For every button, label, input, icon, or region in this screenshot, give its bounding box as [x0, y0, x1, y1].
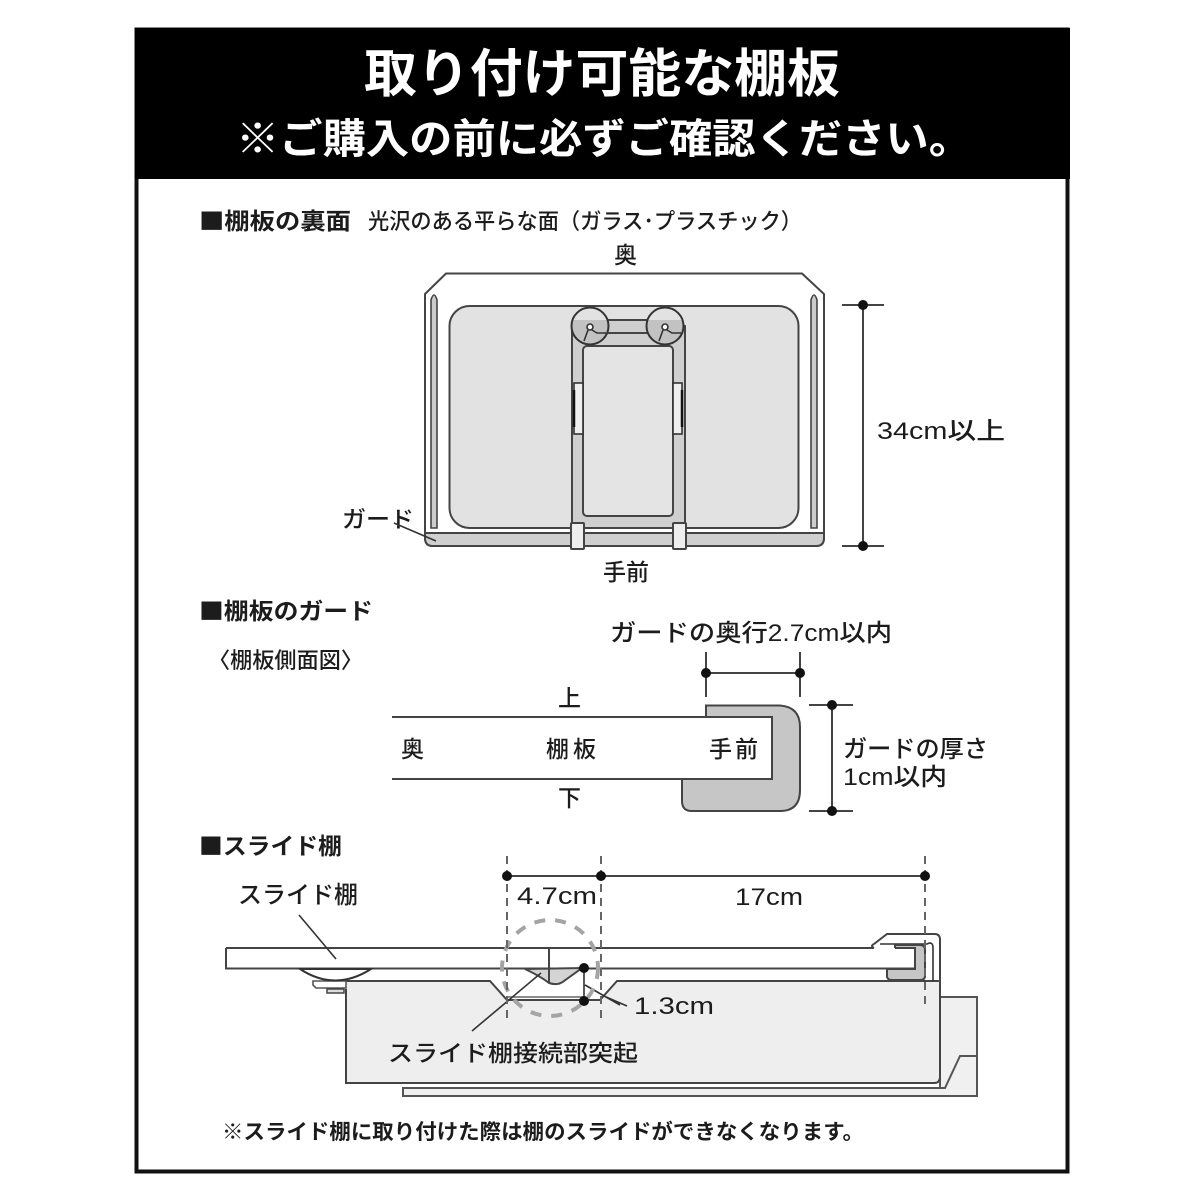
dimension: depth 34cm: 34cm以上 — [877, 418, 1005, 445]
guard section — [682, 706, 800, 811]
header banner — [135, 28, 1070, 179]
rear base piece — [403, 997, 977, 1096]
main base piece — [346, 981, 940, 1083]
guard strip — [425, 533, 824, 546]
outer frame — [136, 30, 1068, 1172]
shelf guard — [887, 945, 925, 980]
hanger bracket — [572, 320, 685, 528]
dimension: 1.3cm: 1.3cm — [634, 993, 714, 1020]
lip of the hook — [872, 944, 874, 948]
label: top: 上 — [558, 679, 581, 713]
mounting hook — [874, 934, 940, 981]
dimension: guard thickness: 1cm以内 — [843, 764, 947, 791]
label: connection protrusion: スライド棚接続部突起 — [388, 1034, 638, 1068]
label: guard — [342, 500, 436, 541]
leader: slide shelf — [299, 915, 336, 959]
text: side view: 〈棚板側面図〉 — [208, 643, 363, 675]
shelf board — [392, 717, 772, 779]
title: 取り付け可能な棚板 — [364, 32, 840, 107]
text: guard depth: ガードの奥行2.7cm以内 — [610, 620, 892, 647]
clips — [571, 523, 686, 549]
dimension: guard thickness — [809, 700, 988, 816]
front pad — [300, 969, 371, 980]
footnote: ※スライド棚に取り付けた際は棚のスライドができなくなります。 — [222, 1116, 864, 1146]
gray panel — [450, 306, 798, 528]
left and right slots — [431, 295, 817, 528]
label: front: 手前 — [603, 553, 649, 587]
dimension: 1.3cm — [579, 963, 714, 1020]
label: guard: ガード — [342, 500, 414, 534]
heading: shelf guard: ■棚板のガード — [199, 592, 373, 626]
label: front: 手前 — [709, 730, 758, 764]
dimension: 4.7cm and 17cm — [502, 856, 930, 1022]
leader: protrusion — [472, 973, 541, 1031]
shelf underside diagram — [425, 274, 824, 549]
heading: shelf underside: ■棚板の裏面 — [199, 202, 351, 236]
dimension: 4.7cm and 17cm: 4.7cm — [517, 883, 597, 910]
label: slide shelf: スライド棚 — [238, 875, 358, 910]
label: back: 奥 — [614, 236, 637, 270]
side view diagram — [392, 679, 800, 813]
slide shelf diagram — [226, 915, 977, 1096]
text: surface requirement: 光沢のある平らな面（ガラス･プラスチック） — [368, 204, 802, 236]
suction cups — [570, 308, 685, 348]
dimension: depth 34cm — [842, 300, 1005, 551]
subtitle notice: ※ご購入の前に必ずご確認ください。 — [236, 105, 972, 165]
connection protrusion — [525, 968, 582, 984]
heading: slide shelf: ■スライド棚 — [199, 827, 342, 861]
slide shelf board — [226, 948, 915, 968]
dashed highlight circle — [502, 920, 598, 1016]
dimension: guard thickness: ガードの厚さ — [843, 736, 988, 763]
label: bottom: 下 — [558, 779, 581, 813]
dimension: guard depth — [701, 652, 805, 697]
label: shelf: 棚板 — [546, 730, 596, 764]
label: back: 奥 — [401, 730, 424, 764]
dimension: 4.7cm and 17cm: 17cm — [735, 884, 803, 911]
